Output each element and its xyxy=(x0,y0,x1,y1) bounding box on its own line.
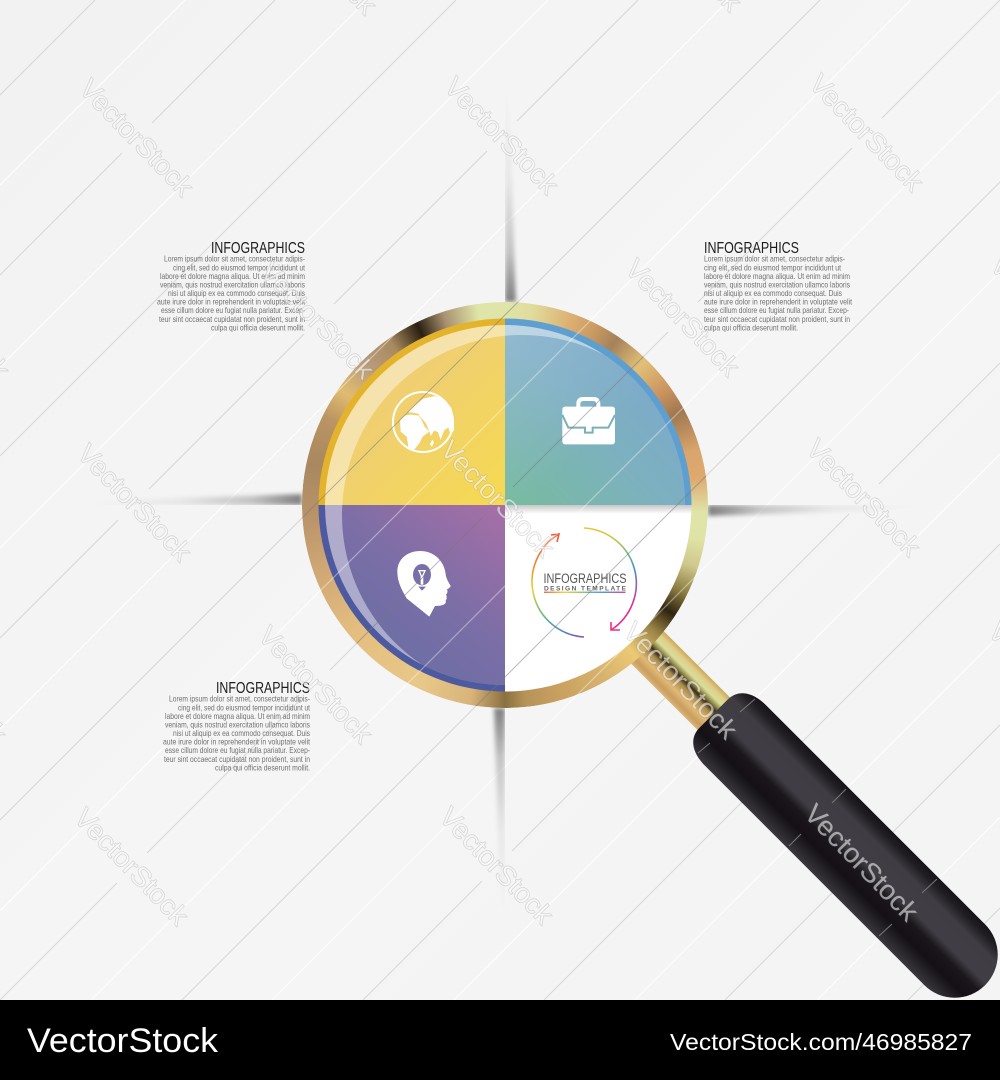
text block: upper right: nisi ut aliquip ex ea commodo consequat. Duis xyxy=(704,289,842,298)
text block: lower left xyxy=(163,680,311,772)
watermarks: VectorStock xyxy=(433,801,560,930)
text block: upper left: Lorem ipsum dolor sit amet, consectetur adipis- xyxy=(164,255,305,264)
text block: upper left: INFOGRAPHICS xyxy=(211,240,305,257)
lens quadrants xyxy=(315,315,702,695)
text block: upper left xyxy=(157,240,306,332)
text block: lower left: cing elit, sed do eiusmod tempor incididunt ut xyxy=(178,703,311,712)
fold shadows xyxy=(75,75,935,935)
text block: upper right: veniam, quis nostrud exercitation ullamco laboris xyxy=(704,280,850,290)
text block: upper right: esse cillum dolore eu fugiat nulla pariatur. Excep- xyxy=(704,306,849,315)
black grip xyxy=(683,683,1000,1016)
watermarks: VectorStock xyxy=(68,802,195,931)
quadrant band: purple xyxy=(315,505,505,695)
watermarks: VectorStock xyxy=(434,434,561,563)
quadrant band: blue xyxy=(505,315,695,505)
quadrant fill: purple xyxy=(325,505,505,685)
text block: upper left: culpa qui officia deserunt mollit. xyxy=(211,323,305,332)
text block: upper right: cing elit, sed do eiusmod tempor incididunt ut xyxy=(704,263,842,272)
quadrant: white xyxy=(505,505,695,695)
text block: upper right: INFOGRAPHICS xyxy=(704,240,799,257)
text block: upper left: veniam, quis nostrud exercitation ullamco laboris xyxy=(160,280,305,290)
text block: upper left: aute irure dolor in reprehenderit in voluptate velit xyxy=(157,298,306,307)
quadrant fill: blue xyxy=(505,325,685,505)
watermarks: VectorStock xyxy=(803,68,930,197)
text block: lower left: culpa qui officia deserunt mollit. xyxy=(215,763,310,772)
text block: lower left: veniam, quis nostrud exercitation ullamco laboris xyxy=(165,720,310,730)
text block: upper right: labore et dolore magna aliqua. Ut enim ad minim xyxy=(704,272,850,281)
text block: lower left: Lorem ipsum dolor sit amet, consectetur adipis- xyxy=(169,695,310,704)
watermarks: VectorStock xyxy=(252,620,379,749)
quadrant fill: yellow xyxy=(325,325,505,505)
icon: head with lightbulb xyxy=(397,551,451,617)
watermarks: VectorStock xyxy=(254,256,381,385)
text block: lower left: esse cillum dolore eu fugiat nulla pariatur. Excep- xyxy=(165,746,310,755)
text block: upper right xyxy=(704,240,853,332)
watermarks: VectorStock xyxy=(798,798,925,927)
icon: globe xyxy=(393,392,454,452)
text block: lower left: INFOGRAPHICS xyxy=(216,680,310,697)
arc arrow: right xyxy=(584,528,636,630)
text block: upper left: cing elit, sed do eiusmod tempor incididunt ut xyxy=(173,263,306,272)
quadrant band: yellow xyxy=(315,315,505,505)
watermarks: VectorStock xyxy=(71,438,198,567)
text block: lower left: aute irure dolor in reprehenderit in voluptate velit xyxy=(163,738,311,747)
text block: lower left: labore et dolore magna aliqua. Ut enim ad minim xyxy=(165,712,310,721)
icon: briefcase xyxy=(562,399,615,444)
arc arrow: left xyxy=(532,534,584,637)
text block: upper right: Lorem ipsum dolor sit amet, consectetur adipis- xyxy=(704,255,845,264)
handle line ticks xyxy=(698,699,937,936)
text block: lower left: nisi ut aliquip ex ea commodo consequat. Duis xyxy=(173,729,310,738)
watermarks: VectorStock xyxy=(438,71,565,200)
footer image id: VectorStock.com/46985827 xyxy=(670,1029,972,1055)
watermarks: VectorStock xyxy=(800,433,927,562)
text block: upper right: aute irure dolor in reprehenderit in voluptate velit xyxy=(704,298,853,307)
footer logo: VectorStock xyxy=(27,1022,219,1060)
lens gold ring xyxy=(302,302,708,708)
text block: upper left: nisi ut aliquip ex ea commodo consequat. Duis xyxy=(168,289,305,298)
text block: upper right: teur sint occaecat cupidatat non proident, sunt in xyxy=(704,315,850,324)
magnifying glass handle xyxy=(609,609,1000,1016)
footer bar xyxy=(0,1000,1000,1080)
watermarks: VectorStock xyxy=(617,616,744,745)
text block: upper left: labore et dolore magna aliqua. Ut enim ad minim xyxy=(160,272,305,281)
badge subtitle: DESIGN TEMPLATE xyxy=(544,586,627,592)
watermarks: VectorStock xyxy=(73,73,200,202)
watermarks: VectorStock xyxy=(619,253,746,382)
circular title badge xyxy=(532,528,636,637)
badge title: INFOGRAPHICS xyxy=(544,571,626,586)
gold neck xyxy=(623,623,737,737)
text block: upper right: culpa qui officia deserunt mollit. xyxy=(704,323,798,332)
text block: upper left: esse cillum dolore eu fugiat nulla pariatur. Excep- xyxy=(161,306,305,315)
diagonal lines over lens xyxy=(302,302,706,706)
lens gloss crescent xyxy=(325,325,702,695)
text block: lower left: teur sint occaecat cupidatat non proident, sunt in xyxy=(164,755,310,764)
text block: upper left: teur sint occaecat cupidatat non proident, sunt in xyxy=(159,315,305,324)
